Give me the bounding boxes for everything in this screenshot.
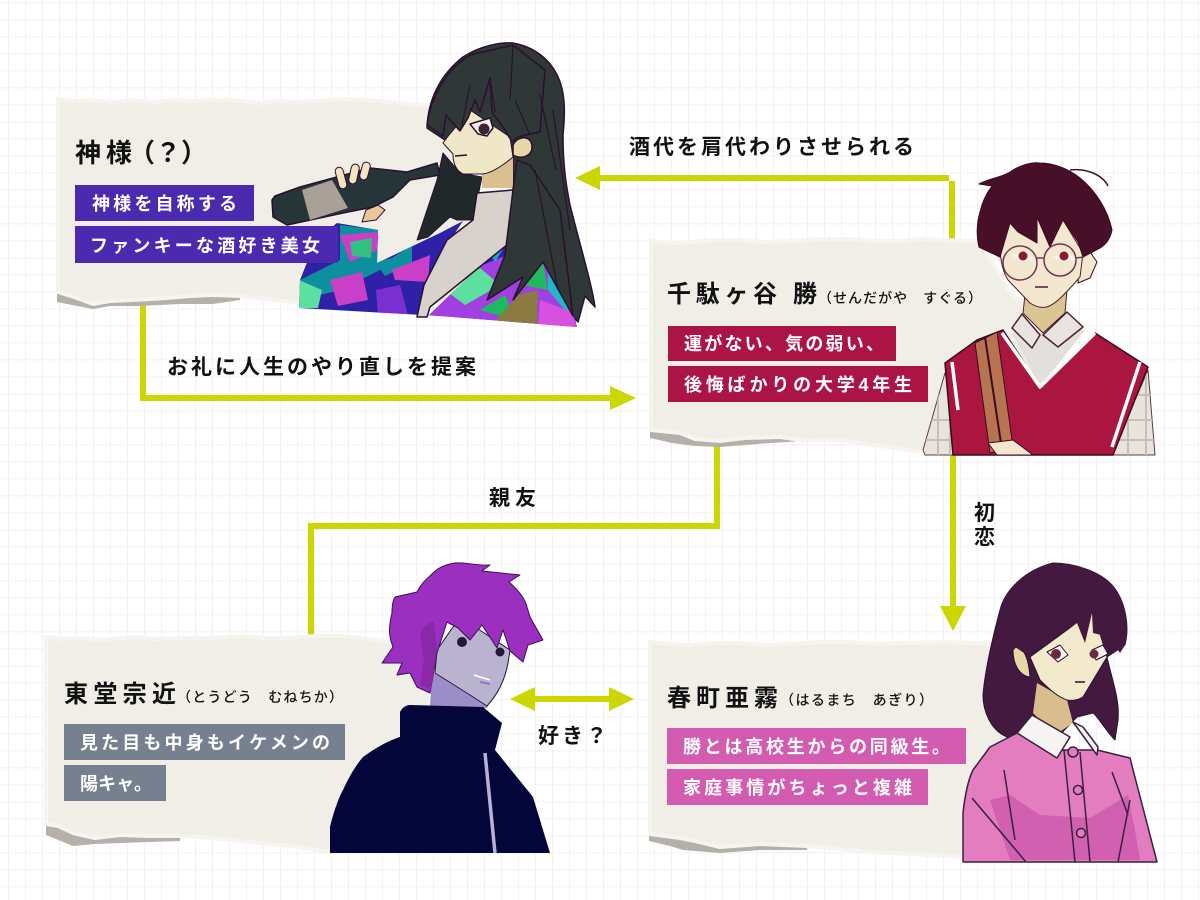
eyes (1047, 645, 1108, 662)
vest (945, 330, 1148, 455)
back hair (427, 43, 595, 322)
tag: 見た目も中身もイケメンの: 見た目も中身もイケメンの (80, 733, 330, 753)
furigana: （はるまち あぎり） (780, 692, 933, 708)
plaid left (926, 394, 951, 455)
hair strands (462, 45, 570, 290)
panel: 神様 (57, 99, 470, 309)
tag: 家庭事情がちょっと複雑: 家庭事情がちょっと複雑 (683, 777, 912, 798)
bangs (1000, 563, 1127, 657)
tag: 勝とは高校生からの同級生。 (667, 728, 966, 764)
tag: 神様を自称する (75, 185, 254, 221)
shirt (963, 733, 1157, 862)
relationship label: 初恋: 恋 (974, 526, 995, 549)
character: 神様 (272, 43, 595, 330)
jacket (299, 221, 577, 327)
name: 千駄ヶ谷 勝: 千駄ヶ谷 勝 (667, 281, 817, 308)
tag: 陽キャ。: 陽キャ。 (80, 774, 152, 794)
mouth (1075, 681, 1085, 683)
relationship label: お礼に人生のやり直しを提案: お礼に人生のやり直しを提案 (167, 356, 476, 379)
relationship label: 初恋: 初 (974, 502, 995, 525)
buttons (1068, 747, 1086, 838)
left hair (417, 153, 482, 240)
name: 春町亜霧: 春町亜霧 (667, 685, 778, 712)
bottle label (302, 180, 348, 220)
mouth (474, 675, 490, 680)
inner shirt (417, 190, 513, 317)
mouth (455, 155, 467, 156)
tag: 後悔ばかりの大学4年生: 後悔ばかりの大学4年生 (684, 374, 912, 395)
arrow: 千駄ヶ谷 and 東堂 (311, 440, 717, 645)
shirt (1012, 330, 1085, 387)
hair shade (420, 622, 437, 690)
hand (988, 440, 1033, 455)
tag: 神様を自称する: 神様を自称する (92, 194, 237, 214)
mouth (1035, 286, 1048, 288)
face (443, 110, 513, 174)
lower hand (362, 205, 385, 222)
tag: ファンキーな酒好き美女 (75, 226, 338, 263)
tag: ファンキーな酒好き美女: ファンキーな酒好き美女 (90, 235, 320, 256)
tag: 勝とは高校生からの同級生。: 勝とは高校生からの同級生。 (683, 737, 950, 757)
shirt shade (990, 795, 1140, 860)
hair (382, 563, 543, 693)
eyes (457, 637, 467, 647)
furigana: （せんだがや すぐる） (818, 290, 982, 306)
ear (513, 138, 532, 157)
neck (430, 650, 500, 708)
glasses (1003, 244, 1084, 280)
face (1030, 610, 1107, 700)
paper: 神様 (57, 99, 470, 309)
relationship label: 初恋 (974, 502, 995, 549)
placket (972, 750, 1130, 862)
plaid right (1120, 372, 1154, 455)
bottle (272, 163, 440, 225)
strap (975, 332, 1013, 453)
sleeves (923, 370, 1155, 455)
back hair (983, 563, 1127, 745)
neck (1023, 290, 1067, 333)
bangs (427, 45, 545, 142)
character: 春町亜霧 (963, 563, 1157, 862)
ear (420, 652, 434, 673)
tag: 後悔ばかりの大学4年生 (668, 366, 928, 402)
tag: 運がない、気の弱い、 (668, 326, 896, 361)
tag: 家庭事情がちょっと複雑 (667, 769, 928, 805)
name: 東堂宗近: 東堂宗近 (64, 681, 176, 708)
face (1000, 215, 1083, 307)
panel: 千駄ヶ谷 勝 (650, 239, 1040, 452)
zipper (485, 753, 495, 853)
ahoge (1070, 170, 1108, 186)
neck (482, 157, 513, 188)
paper: 東堂 (46, 636, 430, 852)
relationship label: 好き？: 好き？ (538, 725, 607, 748)
relationship label: 酒代を肩代わりさせられる: 酒代を肩代わりさせられる (629, 136, 914, 159)
panel: 東堂宗近 (46, 636, 430, 852)
panel: 春町亜霧 (649, 642, 1010, 857)
character: 千駄ヶ谷 勝 (920, 163, 1160, 460)
vest trim (952, 333, 1140, 447)
fingers (334, 161, 371, 190)
jacket (330, 705, 550, 853)
paper: 春町 (649, 642, 1010, 857)
front strands (487, 160, 573, 316)
name: 神様（？）: 神様（？） (75, 138, 207, 168)
tag: 運がない、気の弱い、: 運がない、気の弱い、 (684, 333, 884, 354)
neck (1033, 683, 1073, 735)
arrow: 千駄ヶ谷 to 春町 (940, 450, 966, 631)
tag: 陽キャ。 (64, 765, 166, 801)
arrow: 神様 to 千駄ヶ谷 (140, 300, 636, 410)
character: 東堂宗近 (330, 563, 550, 853)
arrow: 東堂 and 春町 (510, 687, 634, 711)
collar (1012, 312, 1083, 348)
relationship label: 親友: 親友 (489, 487, 536, 510)
eye (470, 118, 493, 136)
paper: 千駄ヶ谷 (650, 239, 1040, 452)
furigana: （とうどう むねちか） (177, 689, 343, 705)
face (435, 617, 510, 706)
hair (977, 163, 1112, 257)
ear (1013, 647, 1030, 677)
collar (1017, 715, 1098, 758)
arrow: 千駄ヶ谷 to 神様 (575, 166, 955, 240)
ear (1078, 252, 1097, 283)
eyes (1011, 252, 1076, 262)
tag: 見た目も中身もイケメンの (64, 724, 345, 760)
